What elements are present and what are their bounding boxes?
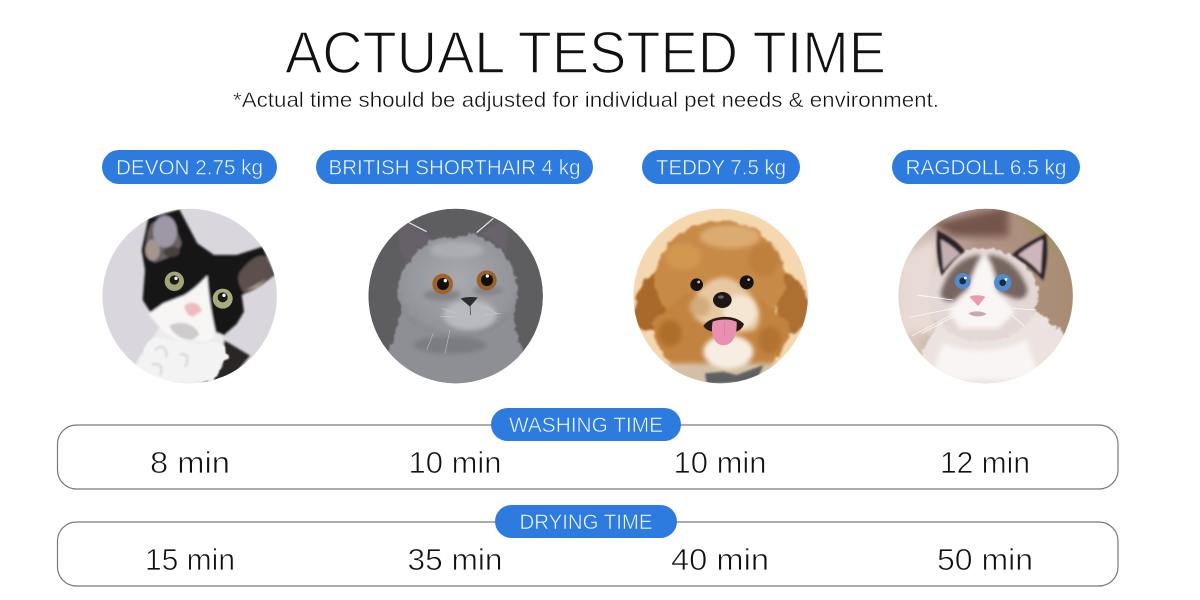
panel: washing time: 10 min [408, 445, 502, 480]
photo: British Shorthair cat [368, 209, 543, 390]
panel: washing time [58, 408, 1118, 489]
label: Devon: DEVON 2.75 kg [116, 156, 263, 180]
subtitle note: *Actual time should be adjusted for individual pet needs & environment. [233, 88, 939, 112]
photo: Teddy dog [633, 209, 810, 387]
badge: drying time [495, 505, 677, 538]
title: ACTUAL TESTED TIME [285, 20, 886, 86]
label: Ragdoll: RAGDOLL 6.5 kg [906, 156, 1066, 180]
label: British Shorthair [316, 150, 593, 184]
panel: washing time: 10 min [674, 445, 766, 480]
label: Teddy [642, 150, 800, 184]
photo: Ragdoll cat [898, 207, 1073, 390]
panel: washing time: 12 min [940, 445, 1030, 480]
badge: drying time: DRYING TIME [520, 511, 652, 534]
label: Ragdoll [892, 150, 1080, 184]
badge: washing time: WASHING TIME [509, 414, 663, 437]
panel: drying time [58, 505, 1118, 586]
badge: washing time [491, 408, 681, 441]
panel: drying time: 15 min [145, 542, 235, 577]
label: Teddy: TEDDY 7.5 kg [656, 156, 786, 180]
panel: drying time: 50 min [937, 542, 1033, 577]
panel: washing time: 8 min [150, 445, 230, 480]
panel: drying time: 40 min [671, 542, 769, 577]
label: Devon [102, 150, 277, 184]
panel: drying time: 35 min [408, 542, 502, 577]
photo: Devon cat [102, 209, 277, 387]
label: British Shorthair: BRITISH SHORTHAIR 4 kg [328, 156, 580, 180]
